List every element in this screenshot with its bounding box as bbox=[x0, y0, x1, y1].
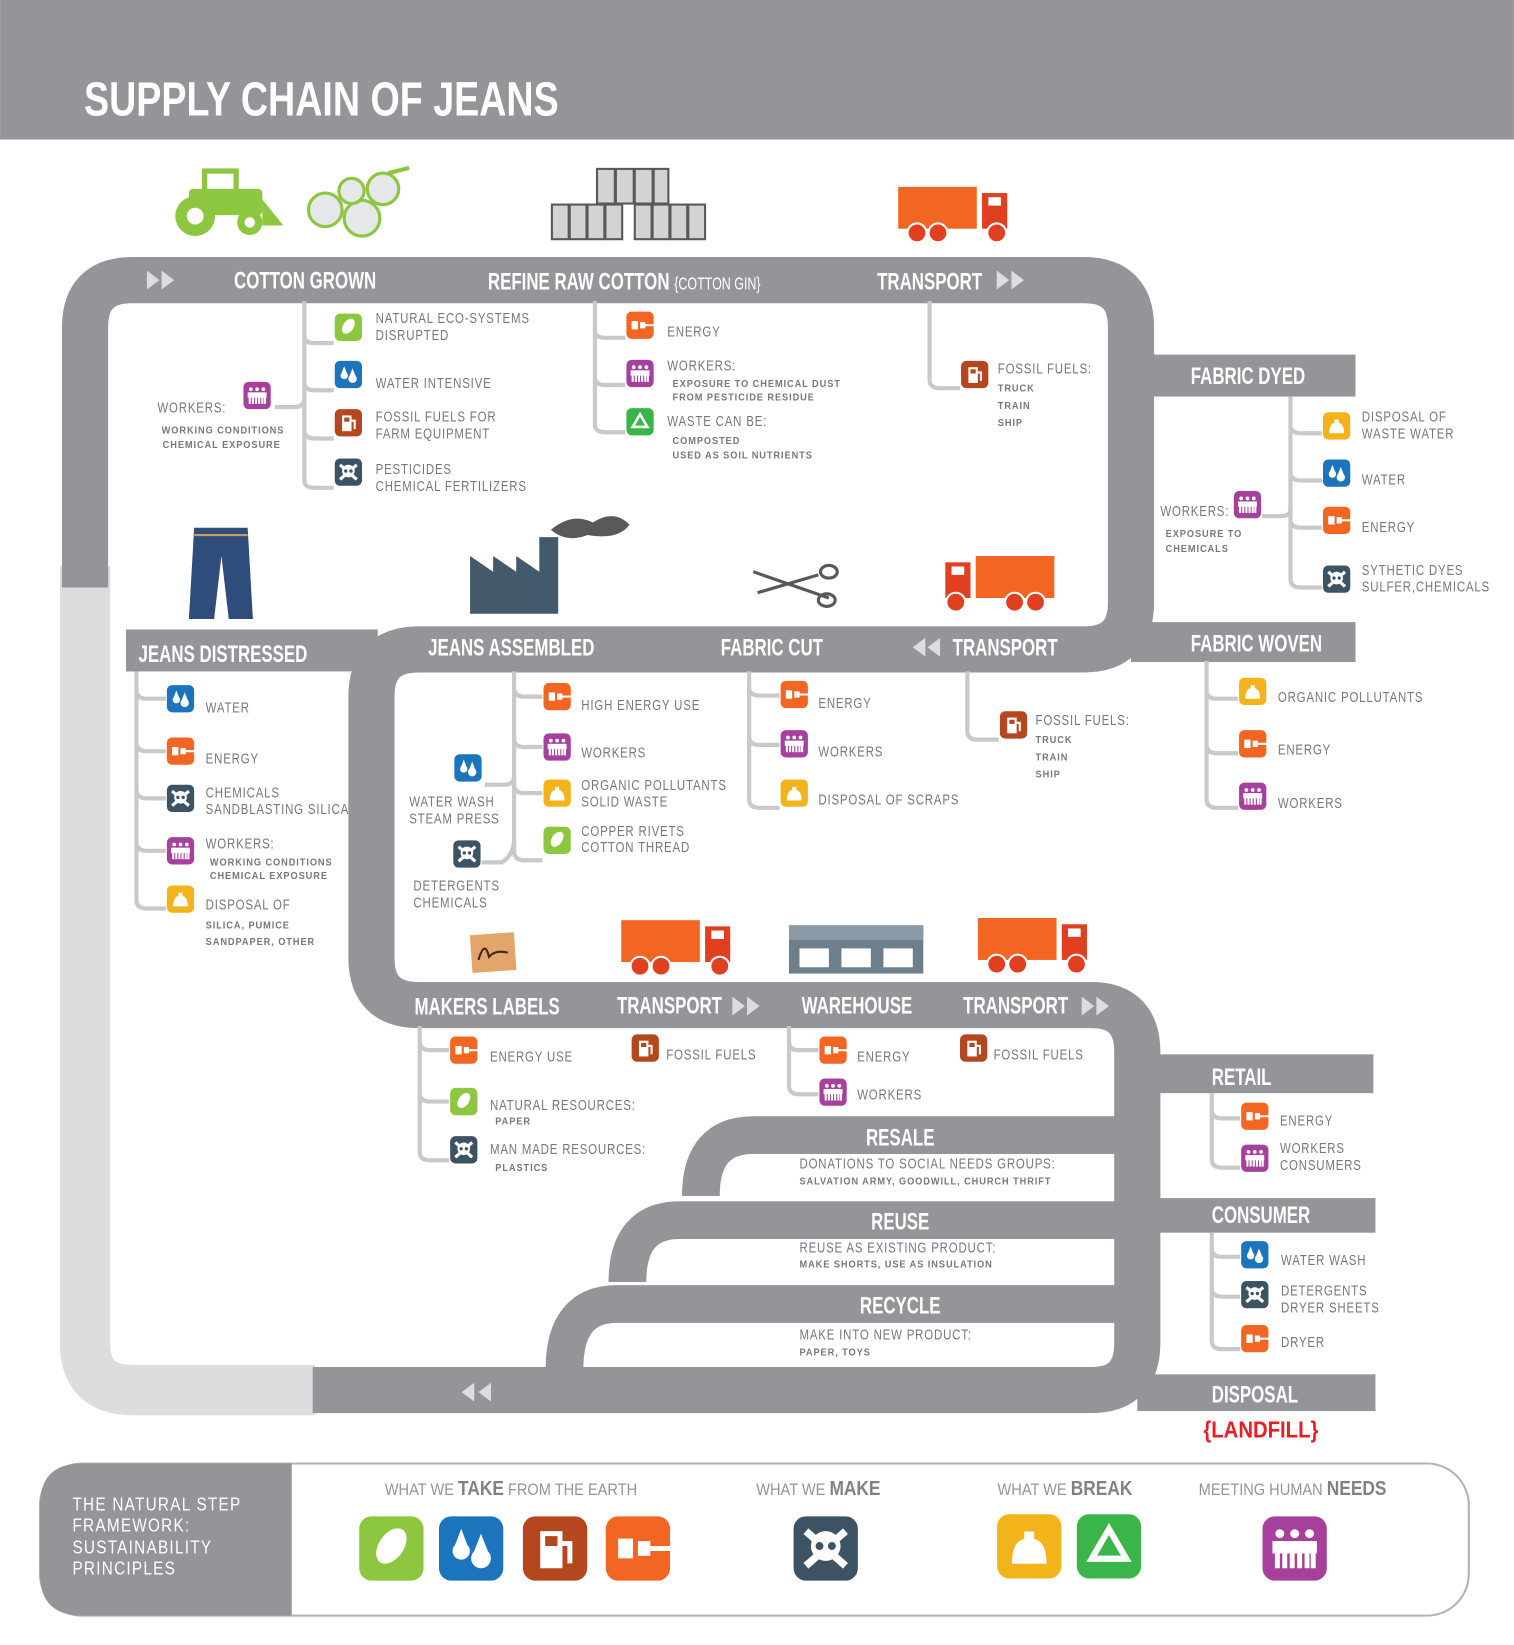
track: light gray return path bbox=[85, 567, 315, 1390]
panel: fabric dyed items: WATER bbox=[1362, 471, 1406, 488]
stage labels: RECYCLE bbox=[860, 1293, 941, 1319]
panel: makers labels items: MAN MADE RESOURCES: bbox=[490, 1141, 646, 1157]
panel: retail items bbox=[1212, 1093, 1362, 1173]
panel: retail items: CONSUMERS bbox=[1280, 1156, 1362, 1173]
panel: jeans distressed items: CHEMICALS bbox=[206, 784, 280, 801]
panel: transport 2 items bbox=[632, 1034, 756, 1063]
text: recycle bbox=[799, 1326, 972, 1359]
stage labels: FABRIC WOVEN bbox=[1191, 631, 1322, 657]
panel: refine raw cotton items: COMPOSTED bbox=[673, 435, 740, 447]
panel: jeans distressed items: WORKING CONDITIONS bbox=[210, 857, 333, 869]
panel: transport top items: FOSSIL FUELS: bbox=[998, 360, 1092, 377]
panel: jeans assembled items: WATER WASH bbox=[409, 793, 495, 810]
panel: refine raw cotton items: EXPOSURE TO CHEMICAL DUST bbox=[673, 379, 841, 390]
panel: fabric woven items: ENERGY bbox=[1278, 741, 1331, 758]
panel: fabric woven items: WORKERS bbox=[1278, 794, 1343, 811]
panel: cotton grown items: FOSSIL FUELS FOR bbox=[376, 408, 496, 425]
panel: refine raw cotton items: WASTE CAN BE: bbox=[667, 413, 767, 429]
stage labels: TRANSPORT bbox=[617, 993, 722, 1019]
panel: transport middle items: TRUCK bbox=[1036, 734, 1072, 746]
panel: jeans assembled items: CHEMICALS bbox=[413, 894, 488, 911]
panel: fabric dyed items: WASTE WATER bbox=[1362, 425, 1454, 442]
panel: jeans distressed items: WORKERS: bbox=[206, 835, 275, 852]
text: reuse bbox=[799, 1239, 996, 1271]
text: resale bbox=[799, 1155, 1056, 1188]
panel: fabric cut items: WORKERS bbox=[818, 743, 883, 760]
panel: refine raw cotton items: FROM PESTICIDE RESIDUE bbox=[673, 392, 815, 404]
illustration: cotton bales bbox=[552, 169, 705, 239]
panel: transport top items: SHIP bbox=[998, 417, 1023, 429]
panel: cotton grown items: WATER INTENSIVE bbox=[376, 375, 492, 392]
panel: warehouse items: WORKERS bbox=[857, 1086, 922, 1103]
illustration: warehouse bbox=[789, 925, 923, 974]
panel: jeans assembled items: DETERGENTS bbox=[413, 877, 500, 894]
legend: THE NATURAL STEP bbox=[72, 1493, 241, 1515]
panel: transport 2 items: FOSSIL FUELS bbox=[666, 1046, 756, 1063]
panel: jeans assembled items: COTTON THREAD bbox=[581, 838, 690, 855]
legend: PRINCIPLES bbox=[72, 1557, 176, 1579]
panel: fabric woven items: ORGANIC POLLUTANTS bbox=[1278, 688, 1423, 705]
panel: fabric cut items bbox=[749, 671, 959, 808]
panel: refine raw cotton items: ENERGY bbox=[667, 323, 721, 340]
panel: jeans distressed items bbox=[136, 671, 349, 948]
panel: jeans assembled items: COPPER RIVETS bbox=[581, 823, 685, 839]
stage labels: FABRIC DYED bbox=[1191, 363, 1305, 390]
illustration: cotton bbox=[309, 168, 409, 236]
legend: WHAT WE TAKE FROM THE EARTH bbox=[385, 1477, 637, 1499]
text: recycle: MAKE INTO NEW PRODUCT: bbox=[799, 1326, 972, 1343]
panel: fabric dyed items bbox=[1160, 397, 1490, 595]
panel: refine raw cotton items: WORKERS: bbox=[667, 357, 736, 374]
panel: retail items: WORKERS bbox=[1280, 1140, 1345, 1156]
panel: fabric cut items: DISPOSAL OF SCRAPS bbox=[818, 791, 959, 808]
panel: transport middle items bbox=[967, 671, 1130, 781]
panel: cotton grown items bbox=[157, 301, 530, 494]
panel: makers labels items: PAPER bbox=[495, 1116, 531, 1128]
panel: consumer items: DETERGENTS bbox=[1281, 1282, 1367, 1299]
text: recycle: PAPER, TOYS bbox=[799, 1347, 871, 1359]
illustration: truck 3 bbox=[978, 918, 1087, 974]
panel: fabric dyed items: SULFER,CHEMICALS bbox=[1362, 578, 1490, 595]
panel: cotton grown items: CHEMICAL EXPOSURE bbox=[163, 439, 281, 451]
stage labels: TRANSPORT bbox=[963, 993, 1068, 1019]
panel: cotton grown items: DISRUPTED bbox=[376, 327, 449, 343]
panel: refine raw cotton items bbox=[595, 301, 841, 462]
panel: fabric dyed items: CHEMICALS bbox=[1166, 543, 1229, 555]
text: reuse: MAKE SHORTS, USE AS INSULATION bbox=[799, 1259, 993, 1271]
panel: cotton grown items: CHEMICAL FERTILIZERS bbox=[376, 478, 527, 494]
stage labels: JEANS DISTRESSED bbox=[139, 641, 307, 668]
panel: cotton grown items: NATURAL ECO-SYSTEMS bbox=[376, 310, 530, 326]
legend: WHAT WE MAKE bbox=[756, 1477, 881, 1499]
panel: fabric dyed items: ENERGY bbox=[1362, 519, 1415, 535]
illustration: truck top bbox=[898, 187, 1007, 242]
title: SUPPLY CHAIN OF JEANS bbox=[84, 73, 559, 127]
panel: cotton grown items: PESTICIDES bbox=[376, 461, 452, 478]
text: resale: SALVATION ARMY, GOODWILL, CHURCH THRIFT bbox=[799, 1176, 1051, 1188]
panel: jeans distressed items: WATER bbox=[206, 699, 250, 716]
panel: fabric dyed items: SYTHETIC DYES bbox=[1362, 562, 1463, 578]
panel: jeans assembled items: STEAM PRESS bbox=[409, 810, 500, 827]
panel: jeans distressed items: CHEMICAL EXPOSURE bbox=[210, 871, 328, 882]
panel: jeans distressed items: SILICA, PUMICE bbox=[206, 920, 290, 932]
panel: makers labels items: PLASTICS bbox=[495, 1162, 548, 1174]
panel: jeans assembled items: HIGH ENERGY USE bbox=[581, 697, 700, 714]
panel: fabric dyed items: DISPOSAL OF bbox=[1362, 408, 1447, 425]
stage labels: TRANSPORT bbox=[877, 269, 982, 295]
legend: WHAT WE BREAK bbox=[998, 1477, 1133, 1499]
panel: makers labels items bbox=[420, 1026, 646, 1174]
landfill: {LANDFILL} bbox=[1203, 1416, 1319, 1443]
panel: jeans distressed items: SANDBLASTING SILICA bbox=[206, 801, 349, 817]
panel: refine raw cotton items: USED AS SOIL NUTRIENTS bbox=[673, 450, 813, 462]
panel: consumer items: DRYER SHEETS bbox=[1281, 1299, 1380, 1316]
panel: warehouse items bbox=[789, 1026, 922, 1106]
panel: jeans assembled items: WORKERS bbox=[581, 744, 646, 761]
panel: consumer items: DRYER bbox=[1281, 1334, 1325, 1350]
legend: MEETING HUMAN NEEDS bbox=[1199, 1477, 1386, 1499]
stage labels: MAKERS LABELS bbox=[414, 994, 560, 1020]
track: main supply chain path bbox=[85, 280, 1375, 1411]
text: resale: DONATIONS TO SOCIAL NEEDS GROUPS: bbox=[799, 1155, 1056, 1172]
panel: jeans distressed items: DISPOSAL OF bbox=[206, 896, 291, 913]
panel: jeans assembled items: SOLID WASTE bbox=[581, 793, 668, 810]
legend: SUSTAINABILITY bbox=[72, 1536, 212, 1558]
illustration: truck reversed bbox=[945, 556, 1054, 612]
panel: cotton grown items: FARM EQUIPMENT bbox=[376, 425, 490, 442]
legend bbox=[40, 1464, 1469, 1616]
stage labels: REUSE bbox=[871, 1209, 929, 1235]
stage labels: CONSUMER bbox=[1212, 1202, 1310, 1229]
panel: jeans assembled items: ORGANIC POLLUTANTS bbox=[581, 777, 727, 793]
illustration: jeans bbox=[189, 528, 253, 619]
panel: makers labels items: ENERGY USE bbox=[490, 1048, 573, 1065]
panel: transport middle items: FOSSIL FUELS: bbox=[1036, 712, 1130, 728]
stage labels: RETAIL bbox=[1212, 1064, 1272, 1091]
stage labels: FABRIC CUT bbox=[721, 635, 823, 661]
panel: jeans distressed items: SANDPAPER, OTHER bbox=[206, 937, 315, 948]
panel: transport 3 items bbox=[960, 1034, 1084, 1063]
stage labels: RESALE bbox=[866, 1125, 935, 1151]
stage labels: TRANSPORT bbox=[953, 635, 1058, 661]
text: reuse: REUSE AS EXISTING PRODUCT: bbox=[799, 1239, 996, 1256]
panel: fabric dyed items: WORKERS: bbox=[1160, 503, 1229, 520]
panel: cotton grown items: WORKING CONDITIONS bbox=[162, 425, 284, 436]
stage labels: COTTON GROWN bbox=[234, 268, 376, 294]
panel: cotton grown items: WORKERS: bbox=[157, 399, 226, 416]
panel: transport middle items: TRAIN bbox=[1036, 752, 1068, 764]
panel: fabric dyed items: EXPOSURE TO bbox=[1166, 529, 1242, 540]
illustration: tractor bbox=[175, 171, 283, 236]
panel: transport top items: TRAIN bbox=[998, 401, 1031, 412]
panel: warehouse items: ENERGY bbox=[857, 1048, 910, 1065]
panel: jeans distressed items: ENERGY bbox=[206, 750, 259, 767]
stage labels: DISPOSAL bbox=[1212, 1382, 1298, 1408]
legend: FRAMEWORK: bbox=[72, 1514, 191, 1536]
stage labels: JEANS ASSEMBLED bbox=[428, 635, 594, 661]
panel: makers labels items: NATURAL RESOURCES: bbox=[490, 1097, 636, 1113]
illustration: maker label bbox=[470, 932, 516, 973]
stage labels: WAREHOUSE bbox=[802, 993, 912, 1019]
panel: consumer items: WATER WASH bbox=[1281, 1252, 1366, 1269]
panel: consumer items bbox=[1212, 1233, 1380, 1352]
illustration: truck 2 bbox=[621, 920, 730, 976]
panel: transport 3 items: FOSSIL FUELS bbox=[994, 1046, 1084, 1063]
illustration: scissors bbox=[753, 565, 837, 606]
stage labels bbox=[139, 268, 1322, 1408]
panel: transport middle items: SHIP bbox=[1036, 769, 1061, 781]
panel: retail items: ENERGY bbox=[1280, 1112, 1333, 1129]
panel: fabric woven items bbox=[1207, 661, 1423, 811]
panel: jeans assembled items bbox=[409, 671, 727, 911]
panel: fabric cut items: ENERGY bbox=[818, 695, 872, 711]
stage labels: REFINE RAW COTTON {COTTON GIN} bbox=[488, 269, 761, 295]
panel: transport top items bbox=[930, 301, 1092, 429]
illustration: factory bbox=[470, 516, 630, 614]
panel: transport top items: TRUCK bbox=[998, 383, 1035, 395]
arrows on track bbox=[147, 271, 1109, 1402]
header bar bbox=[0, 0, 1514, 140]
